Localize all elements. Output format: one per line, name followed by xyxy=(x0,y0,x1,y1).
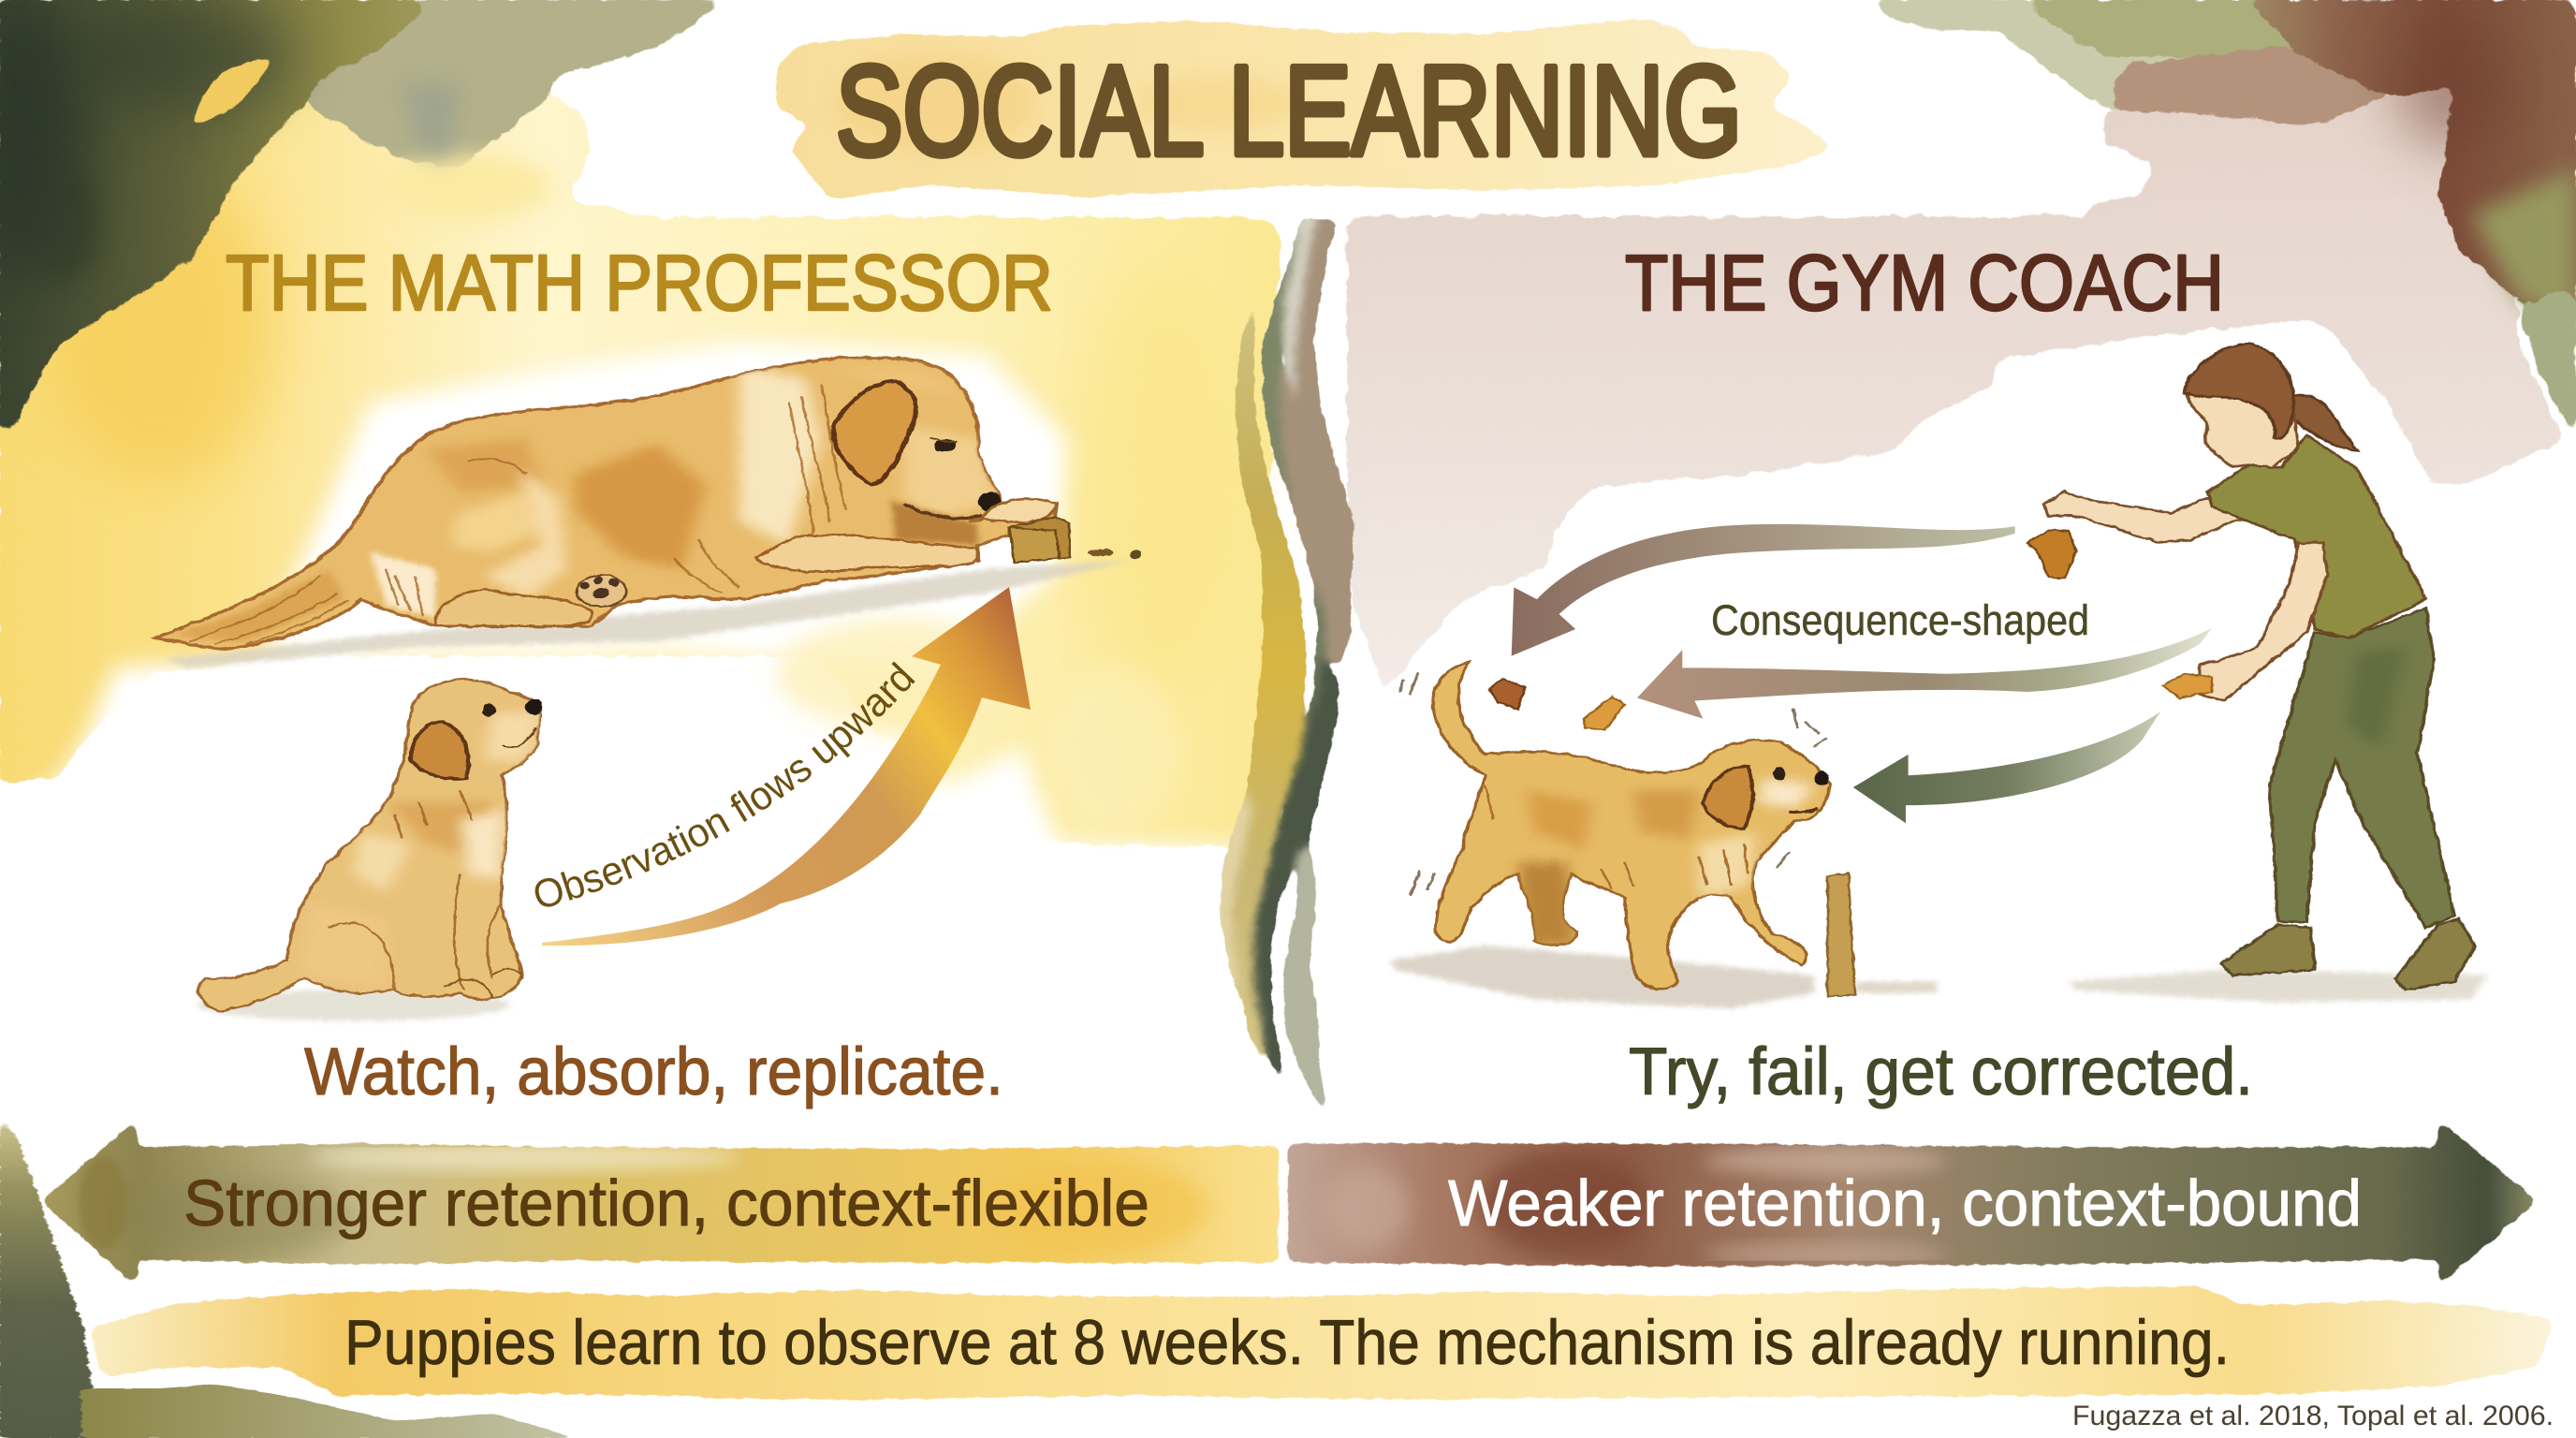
arrow: observation flows upward: Observation flows upward xyxy=(535,661,915,907)
puzzle block xyxy=(1009,517,1070,563)
puppy face xyxy=(482,698,542,747)
treat in hand xyxy=(2163,674,2212,697)
title text: SOCIAL LEARNING xyxy=(836,39,1742,182)
watercolor panel: gym coach taupe wash xyxy=(1348,87,2565,693)
ground shadow xyxy=(2069,970,2487,1003)
heading: the gym coach: THE GYM COACH xyxy=(1625,239,2224,327)
takeaway banner xyxy=(90,1286,2554,1400)
ground shadow xyxy=(165,561,1134,668)
label: consequence-shaped: Consequence-shaped xyxy=(1711,596,2089,644)
pants xyxy=(2270,609,2454,928)
watercolor corner: top left dark olive xyxy=(0,0,728,437)
left arrow shape xyxy=(41,1121,1278,1285)
paw on block xyxy=(982,499,1056,522)
dog front leg xyxy=(755,536,977,572)
left arrow text: Stronger retention, context-flexible xyxy=(183,1167,1149,1240)
dog body xyxy=(156,358,1056,650)
puppy face xyxy=(1773,767,1829,813)
title banner xyxy=(777,19,1833,198)
watercolor corner: top right brown and green xyxy=(1875,0,2576,440)
dog rear paw xyxy=(577,576,626,607)
puppy ear xyxy=(411,722,468,779)
watercolor corner: bottom left olive xyxy=(0,1105,575,1438)
dog muzzle and eye xyxy=(903,438,1002,519)
shoes xyxy=(2220,918,2475,990)
motion lines xyxy=(1399,674,1826,895)
double arrow: left half stronger retention xyxy=(41,1121,1278,1285)
treat crumbs xyxy=(1088,550,1141,559)
tagline: watch, absorb, replicate: Watch, absorb, replicate. xyxy=(304,1035,1003,1109)
double arrow: right half weaker retention xyxy=(1289,1121,2537,1285)
white clearing around the dogs xyxy=(0,343,1254,1123)
right arrow text: Weaker retention, context-bound xyxy=(1448,1167,2362,1240)
hind leg xyxy=(435,590,592,626)
ground shadow xyxy=(1391,946,1814,1008)
heading: the math professor: THE MATH PROFESSOR xyxy=(226,239,1053,327)
neck and face xyxy=(2188,390,2298,480)
upper arm reaching xyxy=(2043,492,2241,542)
illustration: coach woman tossing treats xyxy=(2027,344,2487,1003)
feedback arrow top xyxy=(1512,524,2015,656)
illustration: puppy being corrected xyxy=(1391,662,1937,1008)
citation: Fugazza et al. 2018, Topal et al. 2006. xyxy=(2072,1401,2554,1431)
tagline: try, fail, get corrected: Try, fail, get corrected. xyxy=(1629,1035,2253,1109)
puppy front paws xyxy=(444,969,521,999)
central divider xyxy=(1220,218,1353,1122)
dog ear xyxy=(833,381,915,485)
banner wash xyxy=(90,1286,2554,1400)
feedback arrow middle xyxy=(1637,628,2212,719)
puppy shadow xyxy=(198,990,509,1020)
puppy body xyxy=(198,680,541,1011)
feedback arrow bottom xyxy=(1853,712,2160,823)
illustration: adult dog demonstrating with block xyxy=(156,358,1141,668)
curved arrow xyxy=(542,587,1031,946)
wooden post xyxy=(1828,873,1937,996)
shirt xyxy=(2208,435,2425,638)
illustration: puppy watching xyxy=(198,680,542,1020)
arrow: observation flows upward xyxy=(535,587,1031,946)
ponytail xyxy=(2291,395,2358,451)
falling treat orange xyxy=(1584,697,1625,730)
arrows: consequence feedback xyxy=(1512,524,2212,823)
falling treat brown xyxy=(1489,678,1525,710)
arrow label xyxy=(538,637,955,910)
hair xyxy=(2184,344,2294,438)
right arrow shape xyxy=(1289,1121,2537,1285)
yellow leaf splash xyxy=(191,58,274,127)
lower arm xyxy=(2200,542,2327,701)
puppy body xyxy=(1433,662,1830,989)
banner text: Puppies learn to observe at 8 weeks. The mechanism is already running. xyxy=(344,1307,2230,1378)
dropping treats xyxy=(2027,531,2076,579)
watercolor panel: math professor yellow wash xyxy=(0,0,1281,1123)
title wash xyxy=(777,19,1833,198)
puppy ear xyxy=(1703,766,1752,829)
